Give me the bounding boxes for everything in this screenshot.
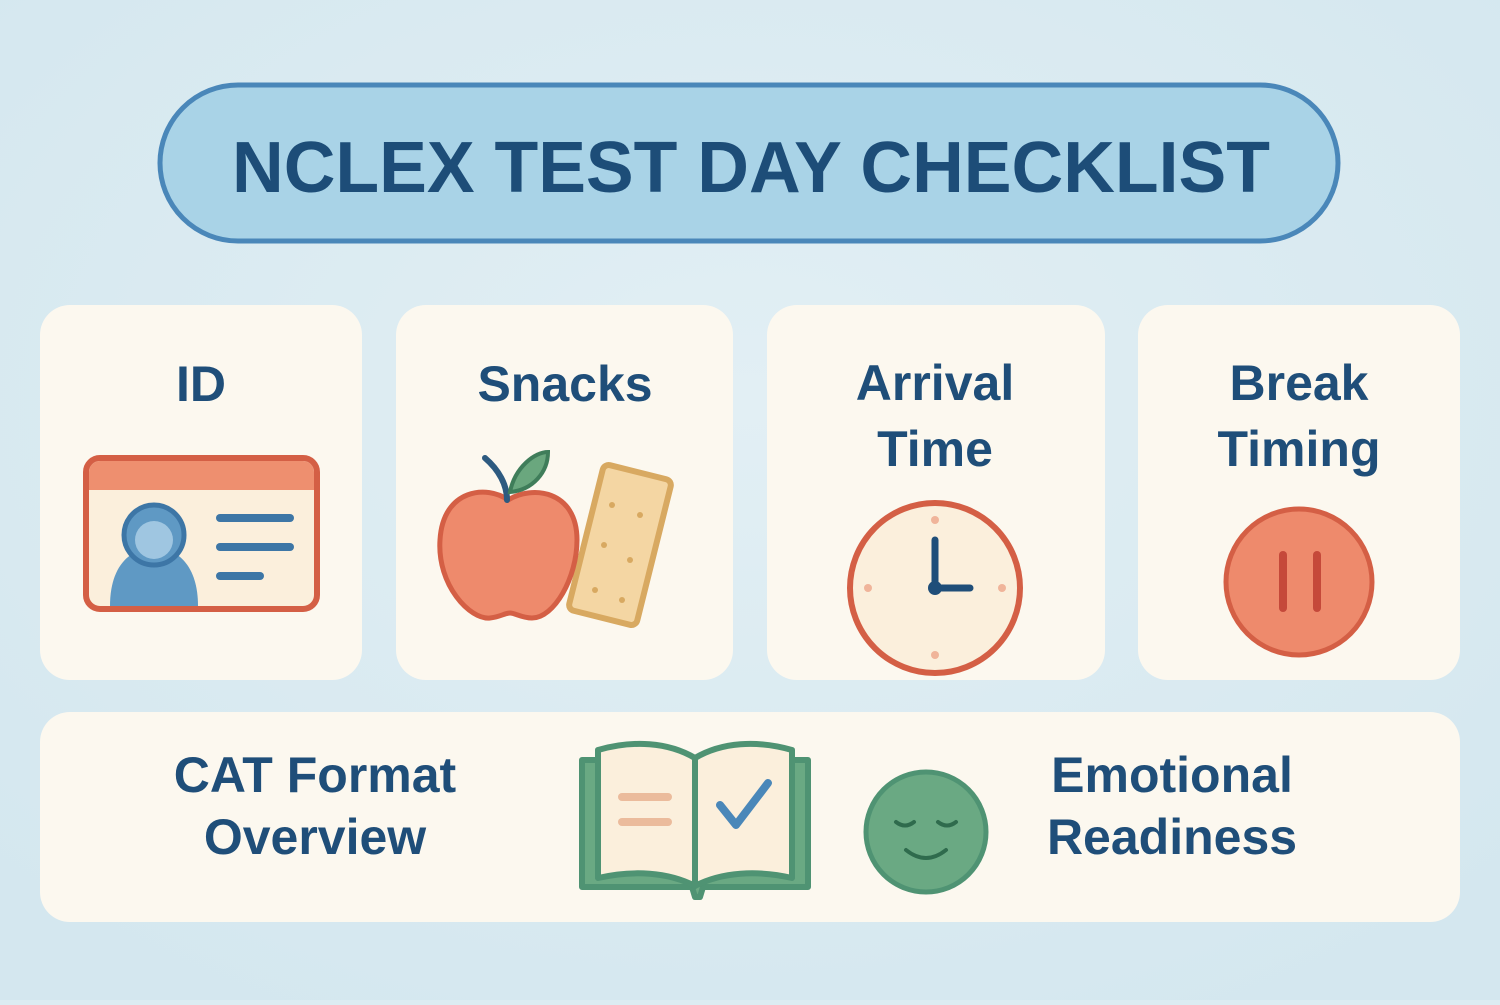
icon: ID card [86, 458, 317, 609]
title: NCLEX TEST DAY CHECKLIST [232, 128, 1270, 208]
panel: Arrival Time [767, 305, 1105, 680]
panel: bottom: Readiness [1047, 809, 1297, 865]
heading: Snacks: Snacks [477, 356, 653, 412]
icon: calm face [866, 772, 986, 892]
icon: pause [1226, 509, 1372, 655]
panel: ID [40, 305, 362, 680]
icon: clock [850, 503, 1020, 673]
panel: bottom: Overview [204, 809, 426, 865]
icon: apple and cracker [440, 452, 672, 626]
heading: Break Timing: Break [1230, 355, 1369, 411]
title [160, 85, 1338, 241]
panel: Arrival Time: Time [877, 421, 993, 477]
panel: Break Timing: Timing [1218, 421, 1380, 477]
heading: CAT Format Overview: CAT Format [174, 747, 457, 803]
panel: bottom [40, 712, 1460, 922]
icon: book with check [582, 744, 808, 897]
panel: Snacks [396, 305, 733, 680]
panel: Break Timing [1138, 305, 1460, 680]
heading: Arrival Time: Arrival [856, 355, 1014, 411]
heading: Emotional Readiness: Emotional [1051, 747, 1293, 803]
heading: ID: ID [176, 356, 226, 412]
